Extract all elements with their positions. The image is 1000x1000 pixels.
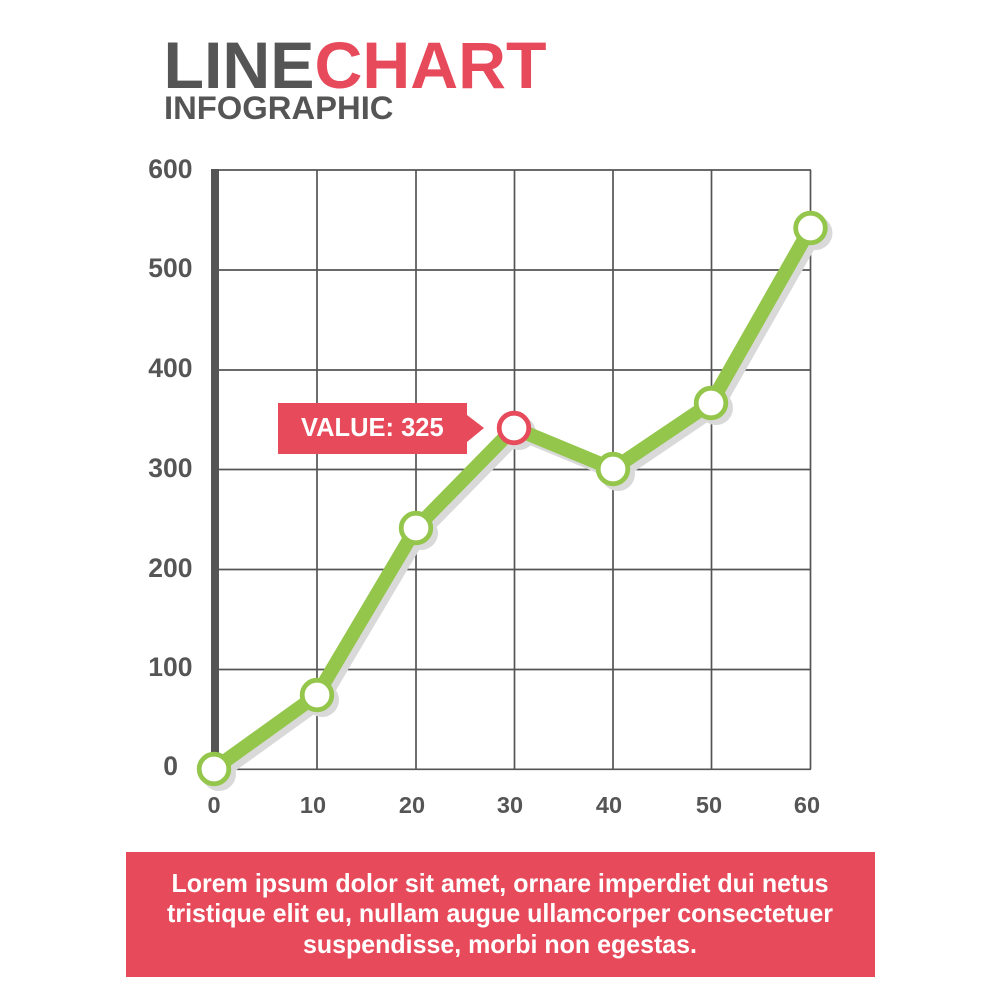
caption text [167,868,833,959]
x axis labels: 40 [596,792,622,818]
highlighted data point [499,413,529,443]
chart grid [214,170,811,769]
y axis labels: 0 [163,751,178,781]
data points [199,213,825,784]
line shadow [202,216,832,791]
caption background [126,852,875,977]
x axis labels: 30 [497,792,523,818]
y axis labels: 100 [148,652,192,682]
y axis labels: 600 [148,154,192,184]
callout text: VALUE: 325 [301,414,444,442]
caption text: suspendisse, morbi non egestas. [303,929,697,959]
x axis labels [207,792,820,818]
x axis labels: 20 [399,792,425,818]
x axis labels: 50 [696,792,722,818]
x axis labels: 0 [207,792,221,818]
y axis labels [148,154,192,781]
y axis labels: 500 [148,253,192,283]
y axis labels: 400 [148,353,192,383]
callout [278,403,484,454]
data line [214,228,810,769]
title [164,28,546,126]
x axis labels: 60 [794,792,820,818]
caption text: tristique elit eu, nullam augue ullamcorper consectetuer [167,898,833,928]
subtitle: INFOGRAPHIC [164,89,394,126]
x axis labels: 10 [300,792,326,818]
y axis labels: 300 [148,453,192,483]
title: line chart: LINECHART [164,28,546,102]
y axis labels: 200 [148,553,192,583]
y axis [211,169,219,769]
caption text: Lorem ipsum dolor sit amet, ornare imperdiet dui netus [172,868,828,898]
caption panel [126,852,875,977]
callout tag [278,403,484,454]
